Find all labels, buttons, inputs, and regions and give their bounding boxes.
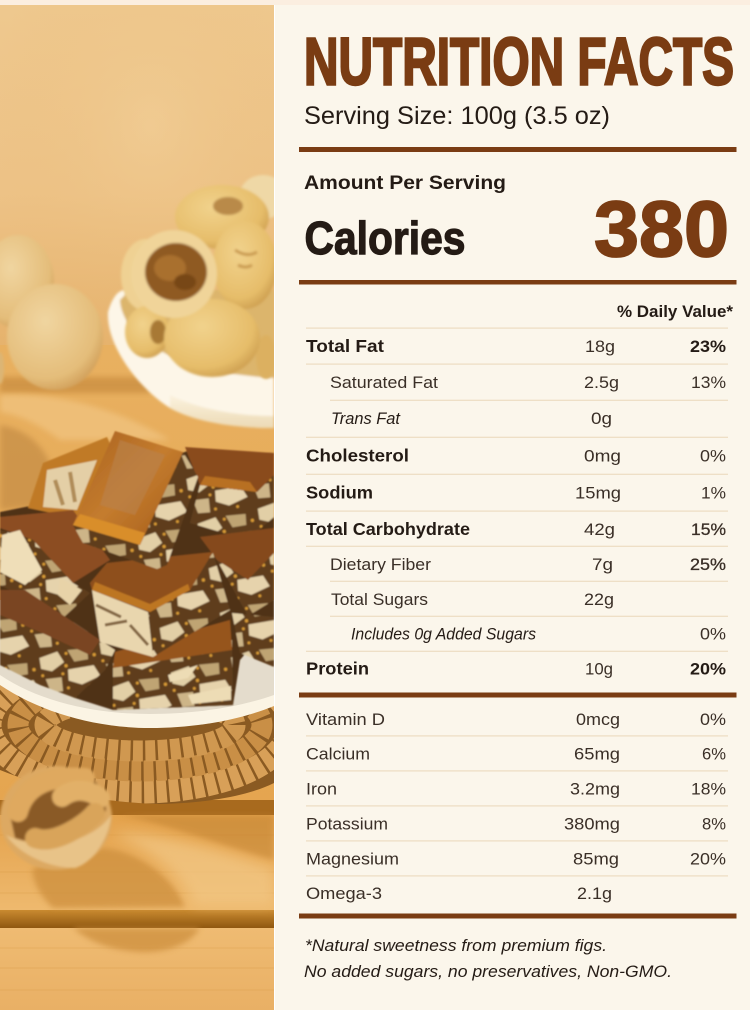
top bar	[73, 431, 198, 569]
row: cholesterol: 0mg	[584, 446, 621, 466]
row: calcium: Calcium	[306, 744, 370, 764]
front bottom bar	[113, 620, 233, 710]
row: vitamin d	[306, 710, 726, 729]
row: sodium: 1%	[701, 484, 726, 502]
row: protein: 10g	[585, 660, 613, 678]
row: magnesium: 85mg	[573, 850, 619, 868]
row: protein: 20%	[690, 660, 726, 678]
row: omega-3: 2.1g	[577, 884, 612, 903]
row: total fat: Total Fat	[306, 336, 384, 356]
row: vitamin d: 0%	[700, 710, 726, 729]
row: total sugars: 22g	[584, 590, 614, 609]
row: total fat	[306, 336, 726, 356]
blurred wall backdrop	[0, 5, 274, 350]
back left bar	[28, 437, 115, 520]
center bar	[90, 552, 230, 657]
bottom rule	[299, 914, 736, 918]
row: cholesterol	[306, 446, 726, 466]
row: cholesterol: 0%	[700, 446, 726, 466]
row: total fat: 23%	[690, 337, 726, 356]
food photo panel	[0, 5, 290, 1010]
row: vitamin d: 0mcg	[576, 710, 620, 729]
row: saturated fat: Saturated Fat	[330, 373, 438, 392]
nutrition facts panel	[275, 5, 750, 1010]
row: added sugars: Includes 0g Added Sugars	[351, 624, 536, 644]
row: magnesium: Magnesium	[306, 850, 399, 868]
row: dietary fiber: 7g	[592, 555, 613, 574]
row: protein	[306, 658, 726, 678]
serving size: Serving Size: 100g (3.5 oz)	[304, 102, 610, 130]
row: total carbohydrate: Total Carbohydrate	[306, 519, 470, 539]
row: calcium	[306, 744, 726, 764]
row: calcium: 65mg	[574, 744, 620, 764]
back right bar	[185, 447, 274, 540]
row: iron	[306, 780, 726, 798]
row: omega-3	[306, 884, 612, 903]
row: trans fat: 0g	[591, 409, 612, 428]
calories block	[304, 172, 729, 273]
white plate	[0, 600, 274, 728]
row: trans fat: Trans Fat	[331, 409, 401, 428]
row: total sugars	[331, 590, 614, 609]
row: total carbohydrate: 42g	[584, 520, 615, 539]
footnote: *Natural sweetness from premium figs.	[305, 936, 607, 955]
rattan mat	[0, 685, 274, 804]
fig walnut bars	[0, 431, 274, 710]
mid right bar	[200, 528, 274, 616]
row: sodium: Sodium	[306, 482, 373, 502]
lower right bar	[232, 613, 274, 667]
row: total fat: 18g	[585, 337, 615, 356]
footnote	[304, 936, 672, 981]
row: magnesium: 20%	[690, 850, 726, 868]
top strip	[0, 0, 750, 5]
dark base under pile	[0, 450, 274, 710]
row: trans fat	[331, 409, 612, 428]
white bowl	[108, 290, 274, 428]
left bar	[0, 510, 110, 618]
table light and shadow	[32, 815, 274, 952]
row: omega-3: Omega-3	[306, 884, 382, 903]
row: potassium	[306, 814, 726, 834]
row: cholesterol: Cholesterol	[306, 446, 409, 466]
nutrition table row separators	[306, 328, 728, 876]
row: saturated fat	[330, 373, 726, 392]
daily value header: % Daily Value*	[617, 303, 734, 321]
walnut half	[0, 766, 112, 870]
calories block: Amount Per Serving	[304, 172, 506, 194]
footnote: No added sugars, no preservatives, Non-GMO.	[304, 962, 672, 981]
row: total carbohydrate	[306, 519, 726, 539]
row: iron: 3.2mg	[570, 780, 620, 798]
row: dietary fiber	[330, 555, 726, 574]
row: added sugars	[351, 624, 726, 644]
bottom left bar	[0, 590, 115, 698]
calories block: 380	[594, 184, 729, 273]
row: potassium: Potassium	[306, 814, 388, 834]
row: potassium: 380mg	[564, 814, 620, 834]
row: sodium: 15mg	[575, 484, 621, 502]
row: total carbohydrate: 15%	[691, 520, 726, 539]
wooden table planks	[0, 345, 274, 1010]
row: iron: 18%	[691, 780, 726, 798]
macro rule	[299, 692, 736, 698]
row: calcium: 6%	[702, 744, 726, 764]
row: dietary fiber: 25%	[690, 555, 726, 574]
row: dietary fiber: Dietary Fiber	[330, 555, 431, 574]
row: potassium: 8%	[702, 814, 726, 834]
row: vitamin d: Vitamin D	[306, 710, 385, 729]
dried figs in bowl	[121, 175, 287, 379]
row: magnesium	[306, 850, 726, 868]
row: saturated fat: 2.5g	[584, 373, 619, 392]
row: iron: Iron	[306, 780, 337, 798]
calories rule	[299, 280, 736, 284]
row: total sugars: Total Sugars	[331, 590, 428, 609]
row: sodium	[306, 482, 726, 502]
calories block: Calories	[304, 212, 466, 264]
row: added sugars: 0%	[700, 624, 726, 644]
row: saturated fat: 13%	[691, 373, 726, 392]
whole walnuts left	[0, 235, 103, 390]
row: protein: Protein	[306, 658, 369, 678]
header rule	[299, 147, 736, 152]
